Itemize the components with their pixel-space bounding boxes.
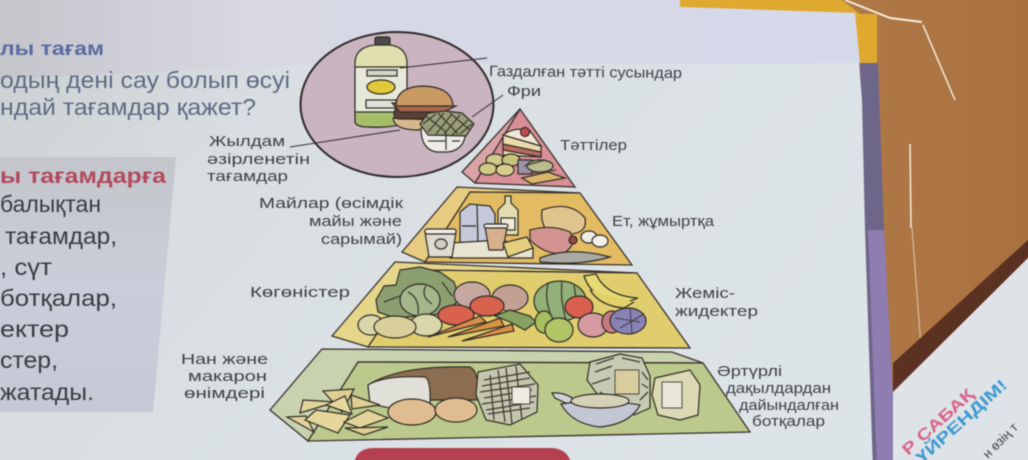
- reflection band on page: [0, 0, 860, 80]
- label: oils and butter: Майлар (өсімдік: [259, 195, 404, 212]
- icon: grain bags: [587, 354, 700, 420]
- label: bread and pasta: макарон: [188, 368, 267, 385]
- box body text: ектер: [0, 316, 69, 342]
- plastic wrap highlights: [845, 0, 955, 360]
- label: oils and butter: [259, 195, 404, 248]
- icon: chips: [287, 389, 388, 435]
- label: assorted grain porridge: дайындалған: [739, 397, 839, 414]
- fast food circle: [300, 32, 494, 177]
- label: sugary drinks: Газдалған тәтті сусындар: [489, 63, 682, 82]
- icon: onions and tomatoes: [438, 282, 528, 325]
- card body text: н өзің т: [980, 420, 1021, 460]
- pyramid tier: sweets: [462, 109, 575, 187]
- icon: cake: [503, 128, 541, 157]
- label: fast food: тағамдар: [207, 168, 288, 185]
- label: meat and eggs: Ет, жұмыртқа: [612, 213, 715, 230]
- pyramid tier: vegetables and fruit: [332, 262, 690, 348]
- label: fast food: [207, 133, 310, 185]
- neighbouring card with dark edge: [893, 229, 1028, 460]
- question text: [0, 67, 290, 120]
- box body text: стер,: [0, 347, 58, 373]
- box body text: жатады.: [0, 379, 94, 405]
- label: fruit and berries: жидектер: [675, 303, 758, 320]
- label: bread and pasta: [181, 351, 268, 402]
- label: fries: Фри: [507, 83, 541, 100]
- label: assorted grain porridge: дақылдардан: [726, 380, 831, 397]
- icon: cabbage: [376, 267, 460, 318]
- label: sweets: Тәттілер: [560, 137, 627, 154]
- label: fast food: Жылдам: [209, 133, 285, 150]
- card heading: lesson: Р САБАҚ: [899, 386, 978, 459]
- label: oils and butter: майы және: [309, 213, 402, 230]
- box body text: балықтан: [0, 191, 101, 217]
- icon: potatoes: [358, 314, 442, 338]
- icon: bread and buns: [368, 367, 478, 425]
- icon: tomato, pears and grapes: [535, 296, 646, 342]
- icon: chicken, ham, eggs and fish: [530, 206, 610, 263]
- heading: healthy food: лы тағам: [0, 39, 104, 60]
- icon: porridge bowl: [552, 393, 640, 427]
- box body text: тағамдар,: [5, 223, 117, 249]
- label: bread and pasta: өнімдері: [184, 385, 265, 402]
- label: oils and butter: сарымай): [321, 231, 402, 248]
- label: fruit and berries: Жеміс-: [675, 285, 735, 302]
- icon: soda bottle: [355, 37, 407, 127]
- icon: cookies and candy: [479, 154, 565, 184]
- box body text: , сүт: [0, 254, 53, 280]
- icon: yoghurt, cheese and butter: [425, 224, 533, 258]
- icon: grain bag: [476, 364, 538, 425]
- box body text: [0, 191, 117, 405]
- label: assorted grain porridge: Әртүрлі: [717, 363, 782, 380]
- yellow book edge: [680, 0, 877, 63]
- label: fruit and berries: [675, 285, 758, 320]
- panel: food info box: [0, 157, 176, 412]
- box body text: ботқалар,: [0, 285, 117, 311]
- red button: [355, 448, 570, 460]
- leader lines: [290, 58, 503, 147]
- question text: одың дені сау болып өсуі: [0, 67, 290, 93]
- pyramid tier: grains: [270, 349, 750, 441]
- icon: burger: [392, 86, 456, 130]
- box heading: ы тағамдарға: [0, 165, 166, 188]
- purple book edge: [860, 63, 897, 460]
- label: bread and pasta: Нан және: [181, 351, 268, 368]
- label: vegetables: Көгөністер: [250, 284, 350, 301]
- icon: milk carton and oil: [460, 196, 518, 245]
- icon: watermelon and bananas: [534, 274, 638, 321]
- icon: fries: [420, 111, 474, 152]
- icon: carrots: [428, 310, 536, 341]
- lower purple edge highlight: [868, 230, 897, 460]
- label: assorted grain porridge: [717, 363, 839, 430]
- pyramid tier: fats and protein: [402, 187, 632, 265]
- question text: ндай тағамдар қажет?: [0, 94, 256, 120]
- label: assorted grain porridge: ботқалар: [752, 413, 825, 430]
- label: fast food: әзірленетін: [207, 151, 310, 168]
